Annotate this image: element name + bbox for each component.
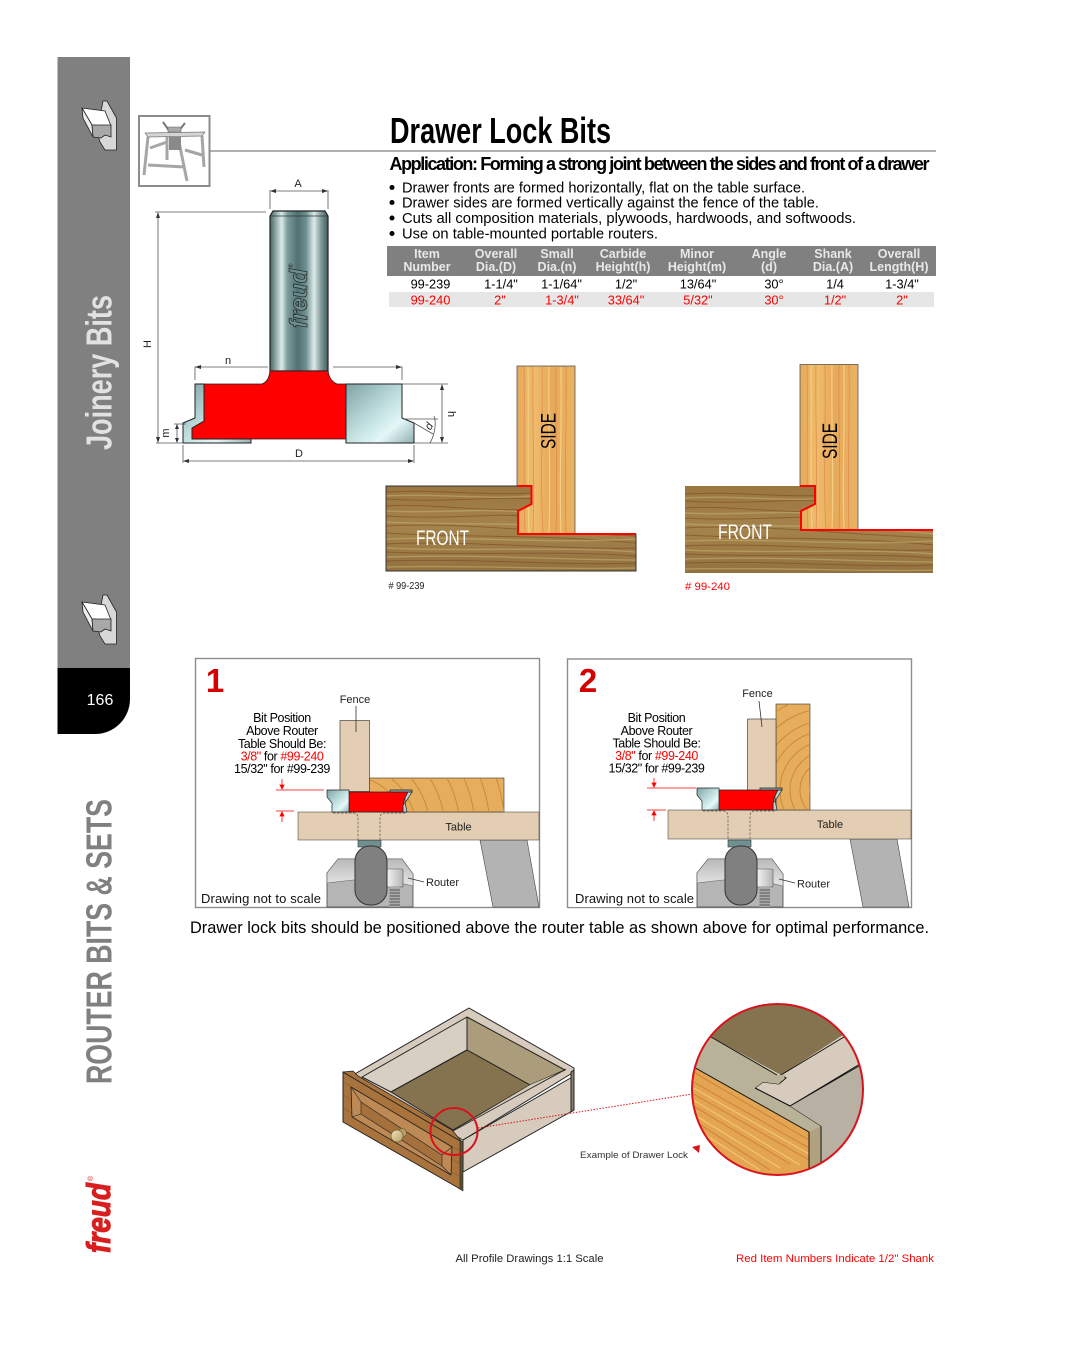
bit position note (234, 711, 330, 776)
table header: Item (414, 247, 440, 261)
table header: Height(m) (668, 260, 726, 274)
bit (327, 790, 412, 812)
leg (480, 840, 539, 907)
dimension labels: D (295, 448, 303, 460)
footer note: scale: All Profile Drawings 1:1 Scale (456, 1253, 604, 1265)
wood face (693, 1068, 808, 1174)
carbide right (346, 384, 414, 443)
row 99-239: 1-3/4" (885, 276, 919, 292)
joint diagram 99-239 (386, 366, 636, 592)
bit position note: Above Router (246, 724, 318, 738)
grey side (790, 1066, 862, 1162)
footer note: red items: Red Item Numbers Indicate 1/2" Shank (736, 1253, 935, 1265)
section label: Router Bits & Sets: ROUTER BITS & SETS (78, 799, 120, 1084)
freud logo: freud (80, 1182, 117, 1253)
height marks (276, 779, 324, 822)
rule under title (210, 150, 936, 152)
knob (391, 1128, 406, 1142)
bit position note: Table Should Be: (238, 737, 326, 751)
row 99-240: 30° (764, 292, 784, 308)
fence label: Fence (742, 688, 773, 700)
sage front top (696, 1038, 820, 1132)
table header: Number (403, 260, 451, 274)
red joint line (800, 486, 933, 530)
leg (850, 839, 909, 907)
freud logo: ® (87, 1175, 95, 1181)
instruction caption: Drawer lock bits should be positioned above the router table as shown above for optimal performance. (190, 919, 929, 937)
bullet list: Cuts all composition materials, plywoods, hardwoods, and softwoods. (402, 211, 856, 227)
row 99-240: 2" (896, 292, 908, 308)
fence (748, 719, 776, 810)
red cutter body (192, 371, 346, 439)
bit position note: 15/32" for #99-239 (234, 762, 330, 776)
table label: Table (445, 822, 472, 834)
row 99-239: 13/64" (680, 276, 716, 292)
row 99-240: 1-3/4" (545, 292, 579, 308)
end grain edge (810, 1126, 820, 1168)
light rim (755, 1036, 858, 1106)
label: example of drawer lock (580, 1145, 700, 1161)
dark floor (712, 1005, 842, 1075)
row 99-240: 33/64" (608, 292, 644, 308)
table (668, 810, 911, 839)
table header: Height(h) (596, 260, 650, 274)
table header: Angle (752, 247, 786, 261)
bit position note: 15/32" for #99-239 (609, 762, 705, 776)
dotted leader (478, 1094, 692, 1128)
row 99-240 (411, 292, 908, 308)
bit position note: 3/8" for #99-240 (241, 750, 324, 764)
bit position note: Bit Position (628, 711, 686, 725)
table header: Shank (814, 247, 852, 261)
shank: freud (285, 268, 313, 328)
step number 2: 2 (579, 662, 597, 699)
side board: SIDE (819, 423, 842, 459)
caption 99-240: # 99-240 (685, 581, 730, 593)
row 99-239: 30° (764, 276, 784, 292)
front board (386, 486, 636, 571)
bit position note: Table Should Be: (612, 736, 701, 750)
side board (800, 364, 858, 530)
back left wall (362, 1017, 467, 1092)
panel: setup 2 (568, 659, 925, 908)
specification table (387, 246, 936, 308)
dimension labels: n (225, 355, 231, 367)
row 99-240: 5/32" (683, 292, 713, 308)
side board (517, 366, 575, 534)
bit position note: Above Router (621, 724, 693, 738)
sidebar heading: Joinery Bits: Joinery Bits (78, 295, 120, 450)
router label (408, 877, 459, 889)
table header: Minor (680, 247, 714, 261)
row 99-239: 1-1/64" (541, 276, 582, 292)
application heading: Application: Forming a strong joint between the sides and front of a drawer (390, 154, 929, 174)
bit position note: 3/8" for #99-240 (615, 749, 698, 763)
row 99-239: 1/4 (826, 276, 844, 292)
table header: Carbide (600, 247, 646, 261)
step number 1: 1 (206, 662, 224, 699)
drawer front (343, 1072, 462, 1190)
dimension labels: d (423, 420, 437, 432)
router label: Router (797, 878, 830, 890)
dimension labels: m (160, 428, 172, 438)
bit profile diagram (142, 178, 457, 463)
bullet list: Drawer fronts are formed horizontally, flat on the table surface. (402, 180, 805, 196)
dimension lines (155, 190, 448, 463)
row 99-240: 99-240 (411, 292, 450, 308)
table header: Dia.(n) (538, 260, 576, 274)
sidebar panel (58, 57, 130, 734)
side board: SIDE (538, 413, 560, 449)
floor (391, 1050, 566, 1131)
bit position note (609, 711, 705, 776)
icon: joint top (82, 101, 116, 150)
table (298, 812, 539, 840)
dimension labels: H (142, 340, 154, 348)
front board: FRONT (416, 527, 469, 550)
bullet list (390, 180, 856, 242)
workpiece (776, 704, 810, 810)
table header (403, 247, 929, 274)
table header: (d) (761, 260, 777, 274)
title: Drawer Lock Bits (390, 110, 611, 151)
rim (343, 1008, 574, 1140)
label: example of drawer lock: Example of Drawer Lock (580, 1150, 688, 1161)
fence label (340, 694, 370, 732)
bit position note: Bit Position (253, 711, 311, 725)
note: Drawing not to scale (201, 891, 321, 906)
fence (340, 720, 370, 792)
shank: ® (288, 263, 295, 268)
row 99-239: 1/2" (615, 276, 637, 292)
router (697, 840, 783, 907)
bit shadow outline (703, 811, 776, 839)
table header: Length(H) (869, 260, 929, 274)
fence label: Fence (340, 694, 370, 706)
table header: Overall (878, 247, 920, 261)
dimension labels (142, 178, 457, 460)
back right wall (467, 1017, 565, 1085)
caption 99-239: # 99-239 (388, 580, 425, 592)
carbide left (183, 384, 251, 443)
front board (685, 486, 935, 573)
bit (697, 788, 782, 810)
workpiece (369, 778, 504, 812)
highlight circle on drawer (430, 1108, 478, 1155)
drawer illustration (343, 1008, 574, 1191)
panel: setup 1 (194, 658, 540, 908)
magnified joint detail (691, 1003, 864, 1176)
table label: Table (817, 819, 843, 831)
note: Drawing not to scale (575, 891, 694, 906)
joint diagram 99-240 (685, 364, 935, 593)
fence label (742, 688, 773, 727)
router label: Router (426, 877, 459, 889)
row 99-239: 1-1/4" (484, 276, 518, 292)
router label (779, 878, 830, 890)
side outer (463, 1076, 574, 1172)
page number: 166 (87, 692, 113, 709)
row 99-239 (411, 276, 919, 292)
bullet list: Drawer sides are formed vertically against the fence of the table. (402, 196, 819, 212)
table header: Overall (475, 247, 517, 261)
router (327, 840, 413, 907)
icon: joint bottom (82, 595, 116, 644)
white backing for note (569, 890, 696, 907)
row 99-239: 99-239 (411, 276, 450, 292)
table header: Dia.(A) (813, 260, 853, 274)
height marks (647, 778, 696, 821)
red joint line (517, 486, 636, 534)
dimension labels: h (445, 411, 457, 417)
bit shadow outline (333, 813, 406, 840)
table header: Small (540, 247, 574, 261)
icon: router table (139, 116, 210, 186)
dimension labels: A (294, 178, 302, 190)
front board: FRONT (718, 521, 772, 544)
row 99-240: 2" (494, 292, 506, 308)
row 99-240: 1/2" (824, 292, 846, 308)
shank (270, 211, 328, 371)
bullet list: Use on table-mounted portable routers. (402, 226, 658, 242)
table header: Dia.(D) (476, 260, 516, 274)
